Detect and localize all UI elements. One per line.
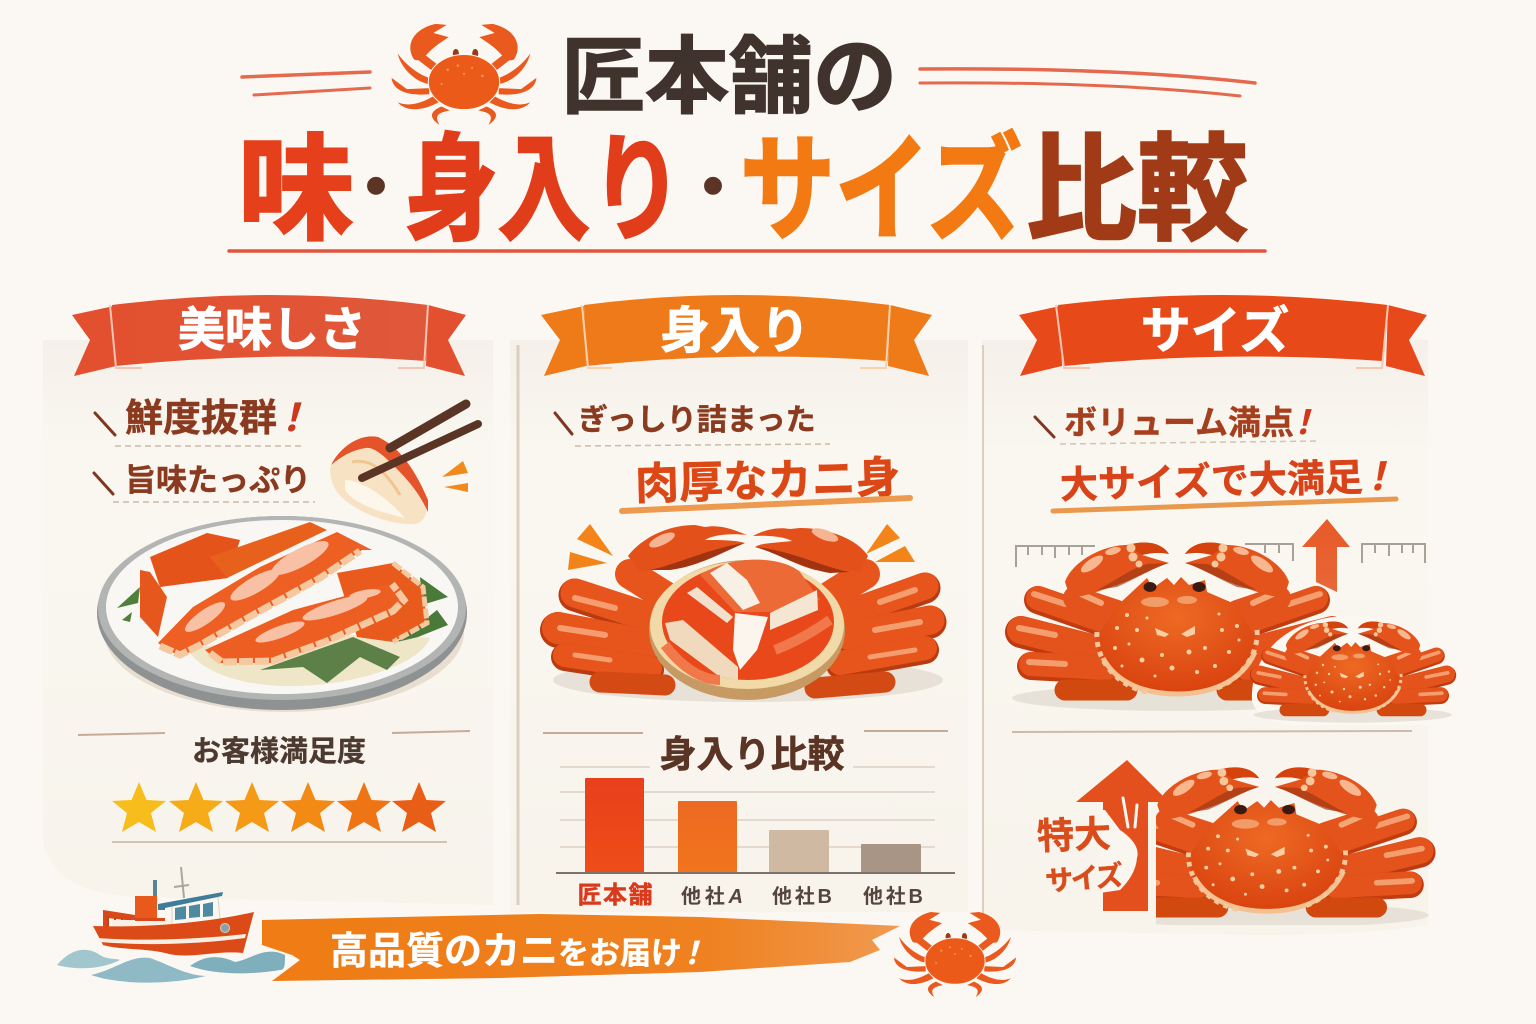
heading: 身入り比較: 身入り比較	[660, 734, 844, 775]
ribbon: 身入り	[541, 295, 932, 376]
bar: 他社B	[769, 830, 829, 874]
ribbon: サイズ	[1019, 295, 1427, 376]
bar: 匠本舗	[585, 778, 644, 874]
panel 2 card background	[510, 340, 968, 912]
title line two: 味・身入り・サイズ比較: 味	[238, 125, 354, 255]
bar: 他社A	[678, 801, 737, 874]
bar labels: 匠本舗	[578, 882, 652, 909]
illustration: opened crab with meat	[553, 525, 943, 702]
text: ボリューム満点！: ボリューム満点！	[1064, 404, 1319, 441]
title line two: 味・身入り・サイズ比較: ・	[683, 155, 743, 222]
heading: お客様満足度: お客様満足度	[192, 735, 366, 768]
title line two: 味・身入り・サイズ比較: 比較	[1026, 125, 1248, 255]
bar labels: 他社B	[772, 885, 832, 908]
ribbon: 美味しさ: 美味しさ	[178, 303, 366, 356]
decorative title crab	[392, 24, 536, 125]
illustration: fishing boat on waves	[57, 867, 285, 983]
bar labels: 他社A	[681, 885, 743, 908]
panel: サイズ	[982, 295, 1452, 935]
rating: six stars	[112, 782, 446, 832]
bar chart: 身入り比較	[556, 767, 955, 909]
text: 旨味たっぷり: 旨味たっぷり	[125, 463, 311, 498]
panel: 美味しさ	[43, 295, 493, 905]
title line two: 味・身入り・サイズ比較: 身入り	[405, 125, 683, 255]
panel: 身入り	[510, 295, 968, 912]
banner: 高品質のカニをお届け！: 高品質のカニをお届け！	[330, 931, 707, 973]
icon: chopsticks holding crab meat	[330, 404, 478, 524]
text: 鮮度抜群！: 鮮度抜群！	[125, 398, 310, 440]
callout: 特大サイズ arrow: サイズ	[1044, 859, 1125, 897]
icon: burst marks left	[568, 524, 613, 570]
title line two: 味・身入り・サイズ比較	[238, 125, 1248, 255]
bar: 他社B second	[861, 844, 921, 874]
icon: burst marks right	[866, 524, 915, 562]
title line two: 味・身入り・サイズ比較: サイズ	[740, 125, 1022, 255]
illustration: large and small crabs	[1012, 542, 1452, 725]
text: 大サイズで大満足！: 大サイズで大満足！	[1060, 456, 1396, 507]
bar labels	[578, 882, 923, 909]
callout: 特大サイズ arrow	[1036, 760, 1169, 911]
panel 3 card background	[982, 340, 1428, 935]
title line two: 味・身入り・サイズ比較: ・	[346, 155, 406, 222]
illustration: extra-large crab	[1156, 767, 1436, 925]
ribbon: サイズ: サイズ	[1141, 303, 1289, 359]
ruler marks	[1016, 544, 1425, 567]
panel 1 card background	[43, 340, 493, 905]
bar labels: 他社B	[863, 885, 923, 908]
text: ぎっしり詰まった: ぎっしり詰まった	[578, 404, 816, 437]
banner: 高品質のカニをお届け！	[262, 914, 900, 981]
text: 肉厚なカニ身: 肉厚なカニ身	[634, 453, 901, 509]
heading: お客様満足度	[78, 731, 470, 768]
icon: sparkle marks	[442, 461, 468, 492]
title accent strokes	[229, 69, 1265, 251]
ribbon: 身入り: 身入り	[660, 303, 810, 359]
icon: small crab at banner end	[894, 912, 1016, 997]
illustration: plate of crab legs	[97, 516, 467, 712]
callout: 特大サイズ arrow: 特大	[1036, 814, 1112, 857]
ribbon: 美味しさ	[72, 295, 466, 376]
arrow: upward size arrow	[1302, 519, 1350, 592]
title line one: 匠本舗の: 匠本舗の	[561, 30, 897, 124]
text: ぎっしり詰まった	[555, 404, 830, 446]
